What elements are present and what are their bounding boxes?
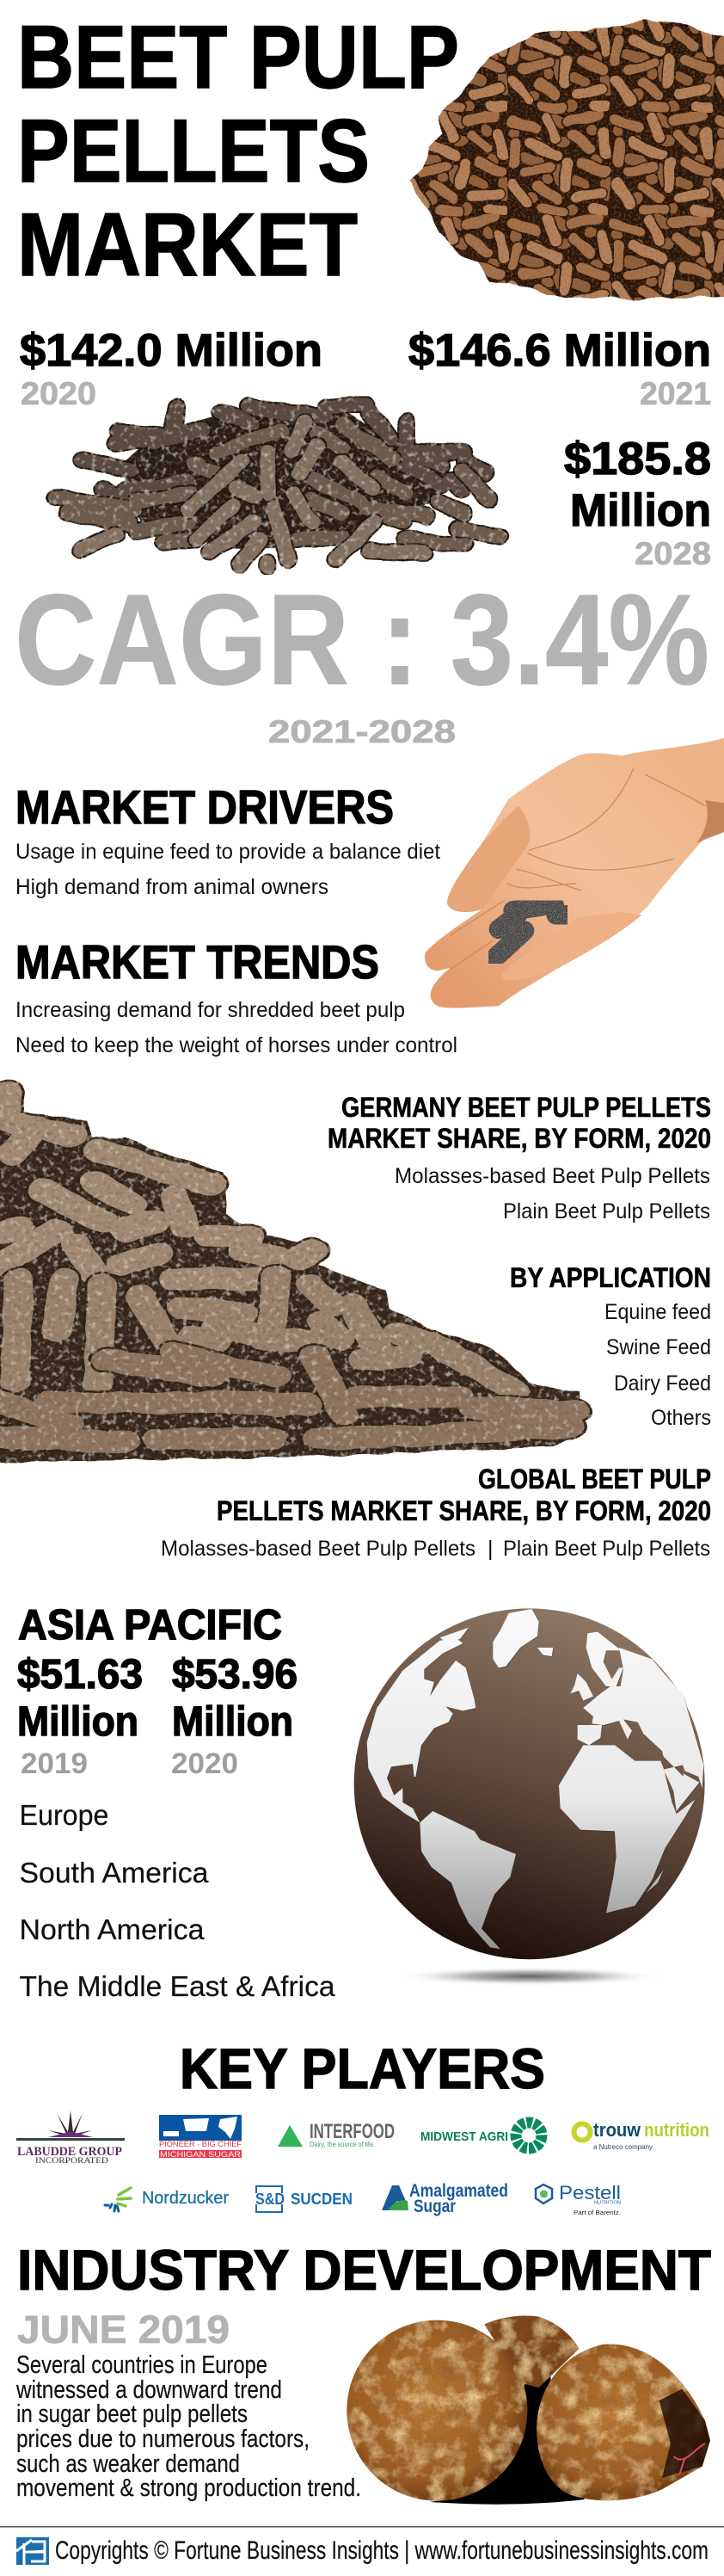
stat: 2020: 2020: [171, 1747, 238, 1780]
trend list: Increasing demand for shredded beet pulp: [15, 998, 405, 1022]
logo: S&D Sucden: SUCDEN: [291, 2191, 353, 2208]
logo: Interfood: Dairy, the source of life.: [310, 2141, 375, 2148]
form legend: Plain Beet Pulp Pellets: [503, 1537, 710, 1561]
region list: North America: [19, 1914, 205, 1945]
logo: Pioneer Big Chief Michigan Sugar: PIONEER · BIG CHIEF: [159, 2140, 242, 2148]
logo: Pestell: [536, 2182, 621, 2216]
logo: Trouw Nutrition: [574, 2119, 709, 2151]
image: sugar beets: [347, 2315, 710, 2505]
heading: key players: KEY PLAYERS: [180, 2037, 545, 2100]
logo: Fortune Business Insights: [16, 2537, 49, 2565]
CAGR period: 2021-2028: [268, 714, 456, 749]
logo: LaBudde Group: INCORPORATED: [35, 2156, 109, 2165]
heading: market trends: MARKET TRENDS: [15, 935, 379, 989]
stat: 2020 value: [20, 325, 322, 411]
stat: 2028 value: [564, 434, 711, 571]
logo: Trouw Nutrition: trouw: [593, 2119, 641, 2141]
image: brown pellets pile: [408, 22, 724, 299]
form legend: |: [488, 1537, 494, 1561]
logo: Midwest Agri: MIDWEST AGRI: [420, 2129, 508, 2144]
heading: market drivers: MARKET DRIVERS: [15, 780, 394, 834]
logo: Pioneer Big Chief Michigan Sugar: [159, 2115, 242, 2159]
application list: Dairy Feed: [614, 1371, 711, 1396]
stat: 2020: [171, 1652, 298, 1780]
region list: South America: [19, 1857, 209, 1889]
application list: Equine feed: [604, 1300, 711, 1324]
logo: Amalgamated Sugar: Amalgamated: [409, 2181, 508, 2201]
region list: [19, 1799, 335, 2002]
footer: [16, 2536, 709, 2565]
driver list: High demand from animal owners: [15, 875, 328, 899]
trend list: [15, 998, 457, 1057]
stat: 2028 value: 2028: [635, 536, 711, 571]
global market share block: [161, 1464, 711, 1561]
title: BEET PULP: [17, 8, 459, 108]
development text: Several countries in Europe: [16, 2351, 267, 2379]
development text: in sugar beet pulp pellets: [16, 2400, 248, 2428]
development date: JUNE 2019: [17, 2308, 230, 2351]
stat: 2019: $51.63: [17, 1652, 143, 1698]
stat: 2020 value: $142.0 Million: [20, 325, 322, 376]
stat: 2020: Million: [172, 1699, 293, 1745]
stat: 2028 value: $185.8: [564, 434, 711, 484]
form list: Plain Beet Pulp Pellets: [503, 1199, 710, 1223]
beet floor shadow: [430, 2375, 585, 2505]
logo: Pestell: NUTRITION: [594, 2201, 621, 2206]
stat: 2028 value: Million: [570, 485, 711, 536]
logo: Pioneer Big Chief Michigan Sugar: MICHIGAN SUGAR: [160, 2150, 242, 2159]
driver list: Usage in equine feed to provide a balance diet: [15, 840, 440, 864]
stat: 2020 value: 2020: [21, 376, 96, 411]
form list: [395, 1164, 710, 1223]
heading: Germany share: [328, 1092, 711, 1154]
logo: Interfood: [278, 2120, 395, 2148]
title: MARKET: [17, 195, 358, 295]
region list: Europe: [19, 1799, 108, 1831]
application block: [510, 1262, 711, 1430]
Asia Pacific block: [17, 1602, 298, 1780]
logo: Trouw Nutrition: a Nutreco company: [593, 2143, 653, 2151]
logo: Midwest Agri: [420, 2123, 542, 2148]
logos: key players: [16, 2111, 709, 2216]
image: globe: [354, 1608, 705, 1959]
application list: Others: [651, 1406, 711, 1430]
logo: S&D Sucden: S&D: [255, 2191, 285, 2208]
region list: The Middle East & Africa: [19, 1970, 335, 2002]
beet root end: [660, 2389, 710, 2478]
development text: [15, 2351, 361, 2502]
trend list: Need to keep the weight of horses under control: [15, 1033, 457, 1057]
logo: Nordzucker: Nordzucker: [142, 2189, 229, 2208]
development text: witnessed a downward trend: [15, 2376, 282, 2404]
title: [17, 8, 459, 295]
image: large pellets heap: [0, 1082, 586, 1463]
stat: 2019: Million: [17, 1699, 138, 1745]
application list: Swine Feed: [606, 1335, 711, 1359]
logo: S&D Sucden: [255, 2186, 353, 2212]
stat: 2021 value: [408, 325, 711, 411]
market trends block: [15, 935, 457, 1057]
logo: Pestell: Pestell: [559, 2182, 621, 2203]
footer rule: [0, 2526, 724, 2528]
logo: Pestell: Part of Barentz.: [574, 2209, 621, 2216]
title: PELLETS: [17, 102, 370, 201]
form legend: Molasses-based Beet Pulp Pellets: [161, 1537, 476, 1561]
Germany market share block: [328, 1092, 711, 1223]
driver list: [15, 840, 440, 899]
logo: Amalgamated Sugar: Sugar: [414, 2197, 456, 2216]
application list: [604, 1300, 711, 1430]
development text: movement & strong production trend.: [16, 2474, 361, 2502]
logo: Interfood: INTERFOOD: [310, 2120, 395, 2143]
stat: 2019: 2019: [21, 1747, 88, 1780]
development text: such as weaker demand: [16, 2450, 240, 2478]
market drivers block: [15, 780, 440, 899]
form list: Molasses-based Beet Pulp Pellets: [395, 1164, 710, 1188]
image: grey-brown pellets heap: [55, 404, 499, 566]
logo: Nordzucker: [105, 2188, 229, 2211]
globe shadow: [396, 1967, 663, 1986]
stat: 2020: $53.96: [172, 1652, 298, 1698]
heading: global share: [217, 1464, 711, 1526]
stat: 2021 value: 2021: [640, 376, 711, 411]
logo: Trouw Nutrition: nutrition: [644, 2119, 709, 2141]
logo: LaBudde Group: [16, 2111, 125, 2165]
logo: LaBudde Group: LABUDDE GROUP: [17, 2145, 122, 2159]
beet textures: [347, 2315, 710, 2501]
stat: 2021 value: $146.6 Million: [408, 325, 711, 376]
heading: Asia Pacific: ASIA PACIFIC: [18, 1602, 282, 1649]
development text: prices due to numerous factors,: [16, 2425, 310, 2453]
stat: 2019: [17, 1652, 143, 1780]
logo: Amalgamated Sugar: [382, 2181, 508, 2216]
form legend: [161, 1537, 710, 1561]
image: hand holding pellets: [425, 737, 724, 1008]
